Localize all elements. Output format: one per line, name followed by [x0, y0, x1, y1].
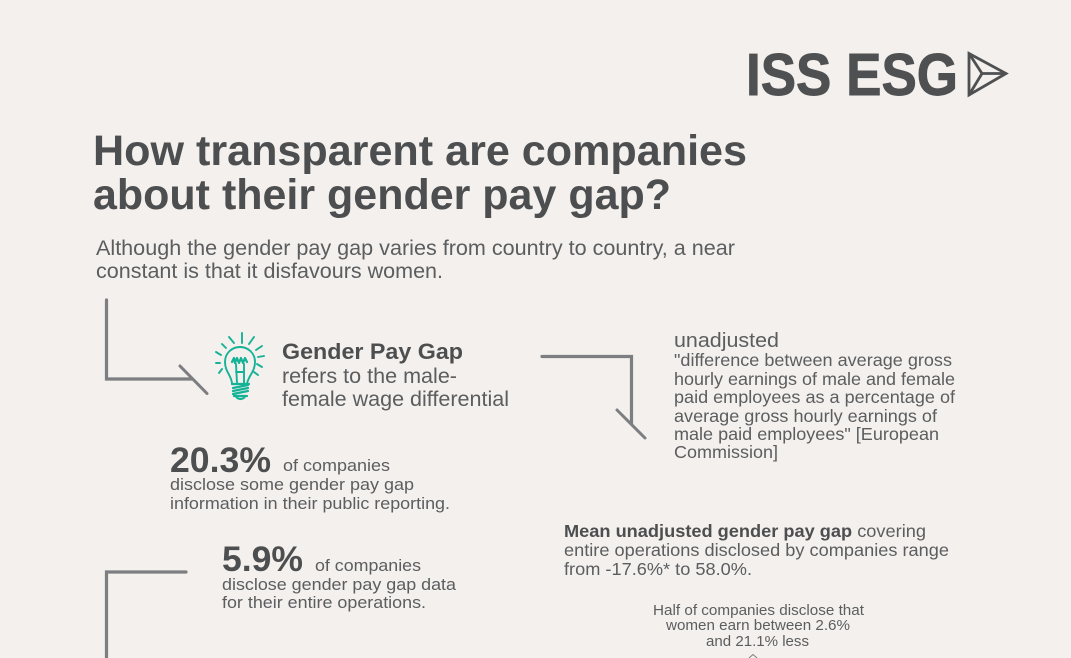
title — [93, 127, 747, 219]
logo: ISS ESG: ISS ESG — [746, 42, 958, 108]
icon: logo arrow — [969, 54, 1006, 95]
stat: 5.9%: 5.9% — [222, 540, 303, 579]
definition: unadjusted: average gross hourly earnings of — [674, 406, 937, 426]
intro text: constant is that it disfavours women. — [96, 259, 443, 283]
stat: 20.3% — [170, 441, 450, 513]
intro text — [96, 236, 735, 283]
definition: unadjusted: hourly earnings of male and female — [674, 369, 955, 389]
definition: Gender Pay Gap: female wage differential — [282, 388, 509, 411]
text: half of companies — [653, 603, 864, 650]
intro text: Although the gender pay gap varies from country to country, a near — [96, 236, 735, 260]
text: mean unadjusted gender pay gap — [564, 521, 949, 579]
icon: marker tip — [749, 654, 757, 658]
icon: light bulb — [216, 333, 264, 399]
stat: 5.9%: for their entire operations. — [222, 593, 426, 612]
definition: Gender Pay Gap — [282, 339, 509, 411]
definition: unadjusted: paid employees as a percentage of — [674, 387, 955, 407]
text: mean unadjusted gender pay gap: from -17.6%* to 58.0%. — [564, 559, 752, 579]
bracket arrow: top right — [542, 356, 645, 438]
definition: Gender Pay Gap: refers to the male- — [282, 365, 457, 388]
stat: 5.9%: of companies — [315, 556, 421, 575]
title: about their gender pay gap? — [93, 171, 671, 219]
text: mean unadjusted gender pay gap: Mean unadjusted gender pay gap covering — [564, 521, 926, 541]
stat: 20.3%: 20.3% — [170, 441, 271, 480]
stat: 20.3%: of companies — [283, 456, 390, 475]
stat: 20.3%: disclose some gender pay gap — [170, 475, 414, 494]
text: half of companies: Half of companies disclose that — [653, 603, 864, 619]
text: half of companies: women earn between 2.6% — [665, 618, 850, 634]
bracket arrow: top left — [106, 300, 207, 394]
definition: unadjusted: male paid employees" [European — [674, 424, 939, 444]
definition: Gender Pay Gap: Gender Pay Gap — [282, 339, 463, 364]
title: How transparent are companies — [93, 127, 747, 175]
stat: 5.9% — [222, 540, 457, 612]
definition: unadjusted: unadjusted — [674, 329, 779, 352]
stat: 20.3%: information in their public reporting. — [170, 494, 450, 513]
stat: 5.9%: disclose gender pay gap data — [222, 575, 457, 594]
bracket arrow: bottom left — [106, 572, 186, 658]
definition: unadjusted: Commission] — [674, 442, 778, 462]
definition: unadjusted — [674, 329, 955, 462]
definition: unadjusted: "difference between average gross — [674, 350, 952, 370]
text: mean unadjusted gender pay gap: entire operations disclosed by companies range — [564, 540, 949, 560]
text: half of companies: and 21.1% less — [706, 634, 809, 650]
